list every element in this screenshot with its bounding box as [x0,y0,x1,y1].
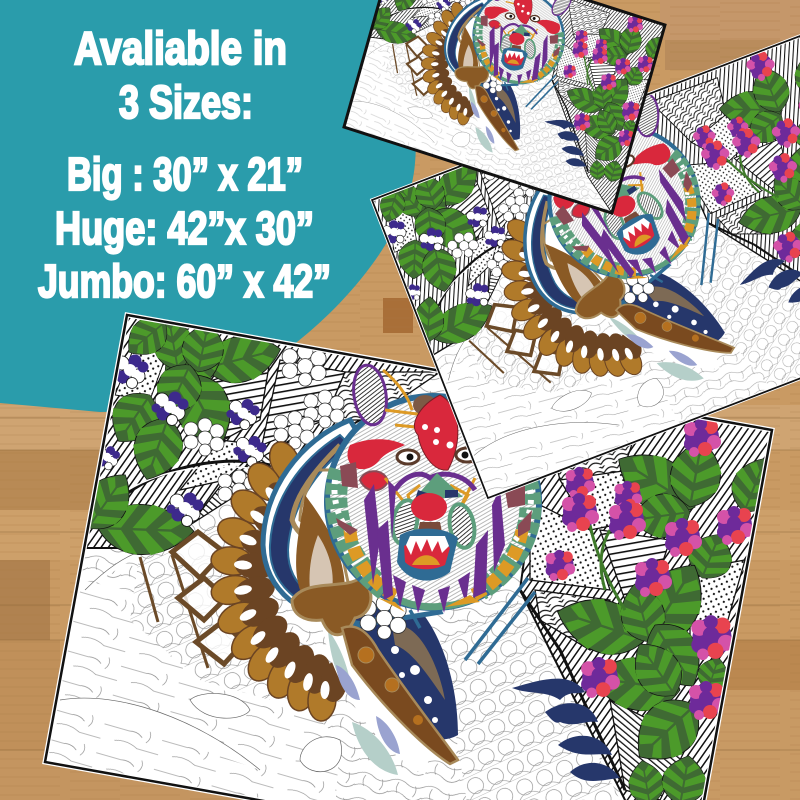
title: available in 3 sizes: Avaliable in [74,22,287,74]
poster: big size [0,280,800,800]
size list: Jumbo: 60” x 42” [38,255,331,307]
title: available in 3 sizes: 3 Sizes: [119,76,253,128]
poster: huge size [283,0,800,597]
size list: Big : 30” x 21” [67,148,303,200]
title: available in 3 sizes [74,22,287,128]
teal title blob [0,0,416,412]
poster: jumbo size shown small [319,0,683,229]
size list [38,148,331,307]
size list: Huge: 42”x 30” [55,202,314,254]
